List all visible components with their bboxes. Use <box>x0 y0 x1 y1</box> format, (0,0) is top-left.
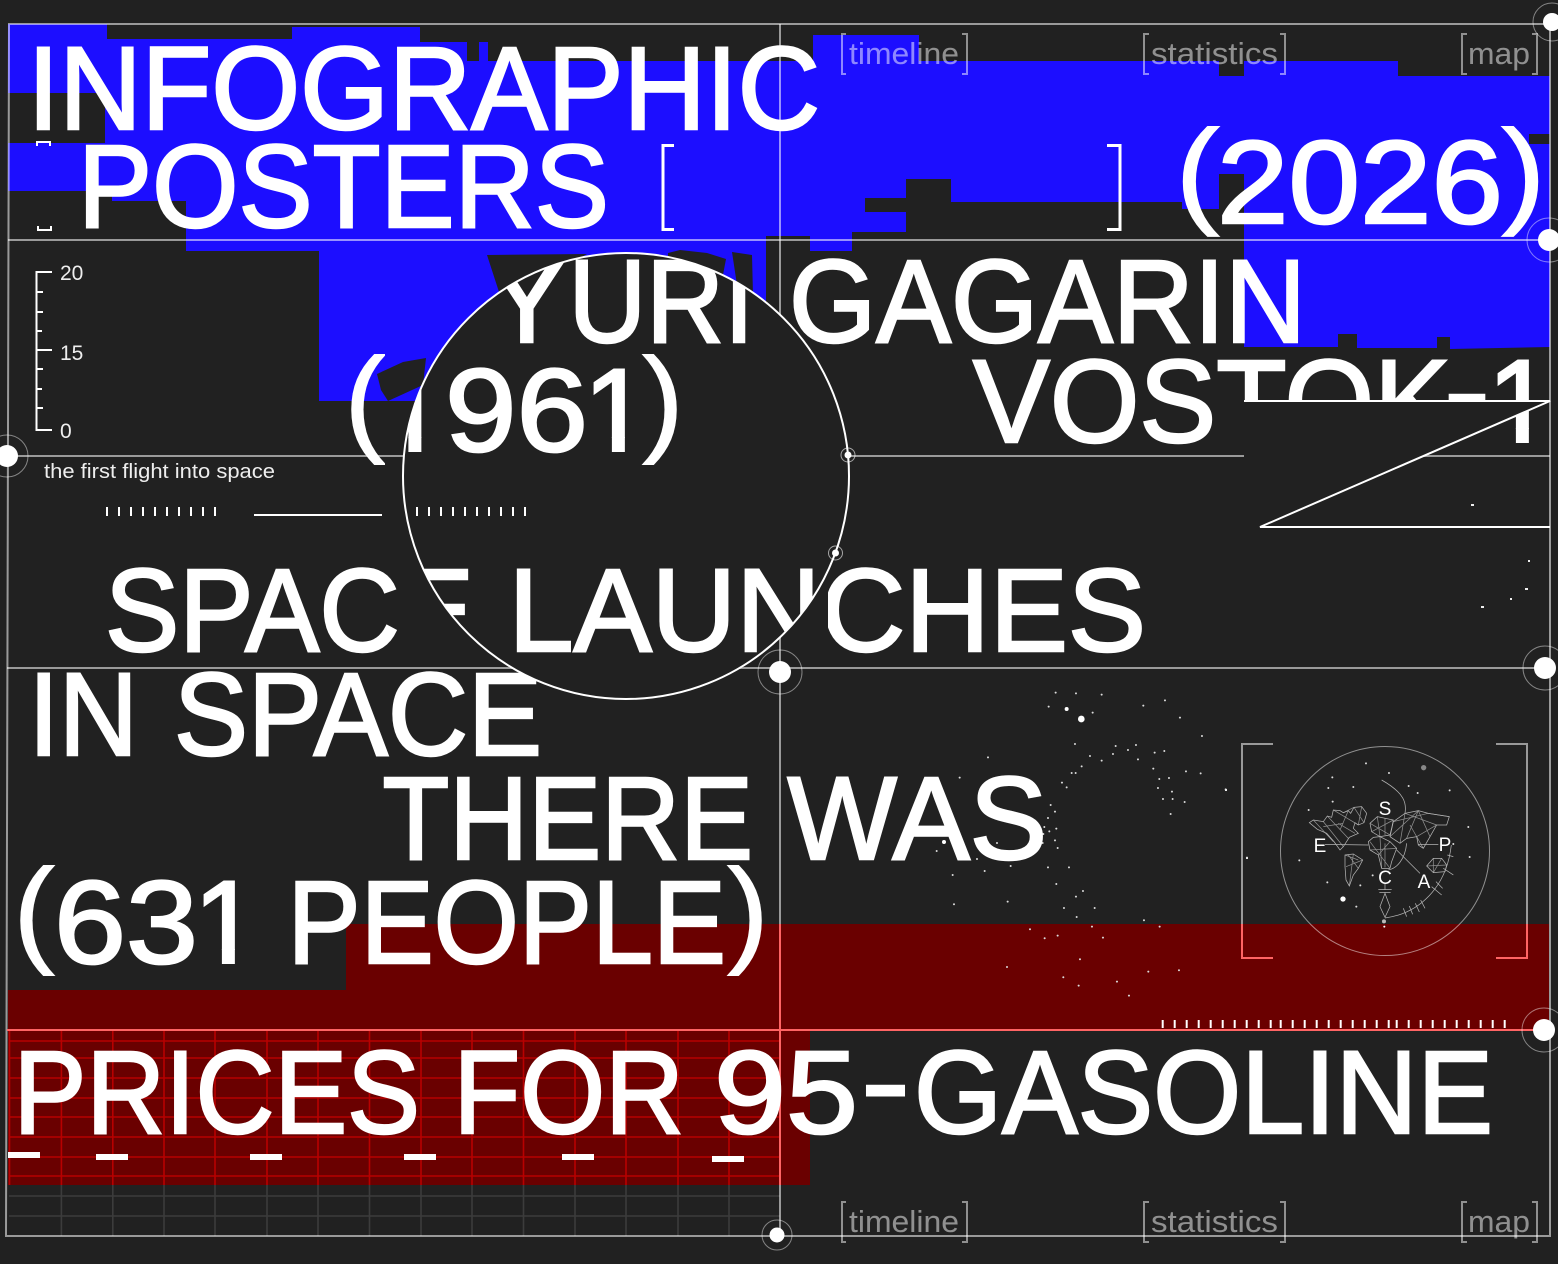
heading: 631 people <box>20 865 762 976</box>
star field <box>936 692 1227 997</box>
node: right upper <box>1527 218 1558 262</box>
heading: 1961, clipped: 96 <box>445 345 588 477</box>
heading: posters: POSTERS <box>78 121 609 253</box>
node: bottom <box>762 1220 792 1250</box>
heading: prices for 95-gasoline: 95 <box>714 1027 858 1159</box>
heading: 1961, clipped: 1 <box>584 370 649 502</box>
heading: there was: WAS <box>788 753 1047 885</box>
nav bottom: map: map <box>1468 1204 1530 1239</box>
heading: in space: IN <box>28 649 138 781</box>
heading: 631 people: 63 <box>54 857 198 989</box>
heading: vostok-1: VOSTOK <box>973 336 1451 468</box>
heading: 1961, clipped: ( <box>344 334 386 466</box>
continent labels: S <box>1379 799 1391 820</box>
pink lines on red <box>7 924 1549 1185</box>
heading: vostok-1: 1 <box>1488 361 1553 493</box>
heading: space launches, clipped: SPACE <box>105 545 474 677</box>
node: circle lower right <box>828 546 842 560</box>
continent labels: E <box>1314 836 1326 857</box>
node: center <box>758 650 802 694</box>
globe with world map <box>1246 746 1490 956</box>
heading: infographic: INFOGRAPHIC <box>28 23 820 155</box>
heading: 631 people: ( <box>13 845 55 977</box>
node: circle right <box>841 448 855 462</box>
world map line drawing <box>1309 780 1453 918</box>
vertical scale axis <box>36 262 83 443</box>
continent labels: P <box>1439 835 1451 856</box>
node: right middle <box>1523 646 1558 690</box>
dark wedge with triangle outline <box>1244 401 1550 527</box>
heading: vostok-1: 1 <box>1488 336 1553 468</box>
heading: yuri, clipped to circle: URI <box>568 236 754 368</box>
heading: year 2026 <box>1175 106 1546 249</box>
dark red shape <box>8 924 1549 1185</box>
heading: year 2026: ) <box>1501 106 1546 238</box>
nav bottom: statistics: statistics <box>1151 1204 1278 1239</box>
heading: yuri, clipped to circle <box>506 260 746 344</box>
dark cut-outs in blue shape <box>377 250 753 401</box>
tick ruler inside circle <box>417 507 525 516</box>
globe stars <box>1246 762 1471 928</box>
heading: vostok-1: - <box>1444 325 1490 457</box>
heading: prices for 95-gasoline: GASOLINE <box>914 1027 1493 1159</box>
heading: year 2026: 2026 <box>1217 117 1503 249</box>
heading: prices for 95-gasoline: PRICES <box>14 1027 420 1159</box>
heading: 631 people: ) <box>727 845 769 977</box>
blue pixelated shape <box>8 24 1550 401</box>
map bracket <box>1242 744 1527 958</box>
big circle <box>403 253 849 699</box>
continent labels: A <box>1418 872 1431 893</box>
node: right lower <box>1522 1008 1558 1052</box>
node: left <box>0 435 28 477</box>
heading: vostok-1 <box>972 358 1529 444</box>
node: top right <box>1533 3 1558 41</box>
tick ruler bottom right <box>1163 1020 1505 1028</box>
short rule <box>254 514 382 516</box>
nav bottom: timeline: timeline <box>849 1204 959 1239</box>
vertical scale axis: 20 <box>60 262 83 285</box>
chart grid on red <box>9 1031 780 1185</box>
chart grid on dark <box>9 1185 780 1236</box>
heading: space launches, clipped: LAUNCHES <box>508 545 1146 677</box>
continent labels <box>1314 799 1451 893</box>
heading: 631 people: 1 <box>194 882 259 1014</box>
heading: prices for 95-gasoline <box>14 1016 1493 1159</box>
heading: year 2026: ( <box>1175 106 1220 238</box>
large bracket left <box>663 146 674 230</box>
nav top: map: map <box>1468 36 1530 71</box>
tick ruler left <box>107 507 215 516</box>
price dashes <box>8 1152 744 1162</box>
heading: in space <box>28 649 542 781</box>
continent labels: C <box>1378 868 1392 889</box>
heading: there was <box>382 753 1047 885</box>
vertical scale axis: 0 <box>60 420 72 443</box>
small bracket marker <box>37 142 51 230</box>
heading: yuri, clipped to circle: Y <box>488 236 566 368</box>
large bracket right <box>1107 146 1120 230</box>
heading: 1961, clipped <box>351 354 677 465</box>
heading: 631 people: PEOPLE <box>288 857 726 989</box>
nav top: timeline: timeline <box>849 36 959 71</box>
heading: 1961, clipped: ) <box>642 334 684 466</box>
heading: in space: SPACE <box>174 649 542 781</box>
heading: prices for 95-gasoline: - <box>861 1016 910 1148</box>
stars near wedge <box>1225 504 1530 859</box>
heading: there was: THERE <box>382 753 753 885</box>
vertical scale axis: 15 <box>60 342 83 365</box>
heading: gagarin: GAGARIN <box>789 236 1306 368</box>
heading: space launches, clipped <box>108 567 1142 654</box>
heading: 1961, clipped: 1 <box>584 345 649 477</box>
caption: the first flight into space <box>44 461 275 483</box>
heading: prices for 95-gasoline: FOR <box>454 1027 684 1159</box>
heading: 1961, clipped: 1 <box>380 370 446 502</box>
heading: 631 people: 1 <box>194 857 259 989</box>
nav top: statistics: statistics <box>1151 36 1278 71</box>
heading: 1961, clipped: 1 <box>380 345 446 477</box>
